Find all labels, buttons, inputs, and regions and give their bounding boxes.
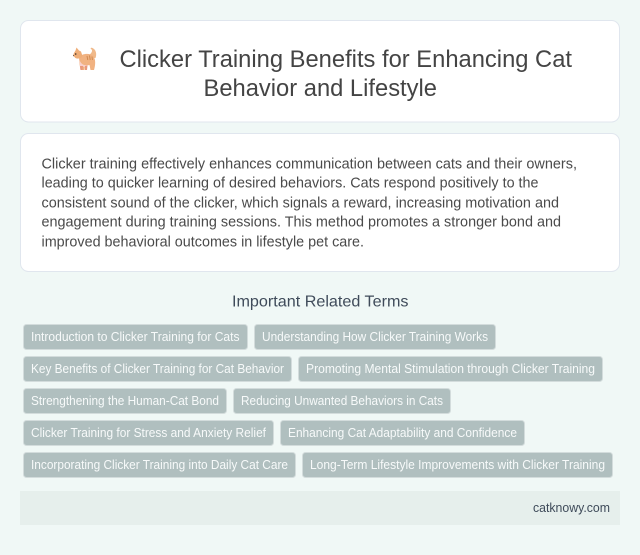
tag: Introduction to Clicker Training for Cats: [31, 330, 240, 344]
tag: Long-Term Lifestyle Improvements with Clicker Training: [310, 458, 605, 472]
panel: summary card: [20, 134, 620, 272]
tag: Key Benefits of Clicker Training for Cat Behavior: [31, 362, 284, 376]
summary text: improved behavioral outcomes in lifestyle pet care.: [42, 234, 364, 250]
tag: [302, 452, 612, 478]
tag: [24, 388, 226, 414]
tag: [280, 420, 524, 446]
footer source: catknowy.com: [533, 501, 610, 515]
tag: [24, 452, 296, 478]
tag: Understanding How Clicker Training Works: [262, 330, 488, 344]
tag: Reducing Unwanted Behaviors in Cats: [241, 394, 443, 408]
tag list: [24, 324, 612, 478]
tag: Incorporating Clicker Training into Daily Cat Care: [31, 458, 288, 472]
summary text: consistent sound of the clicker, which signals a reward, increasing motivation and: [42, 195, 559, 211]
panel: header card: [20, 20, 620, 122]
icon: cat: [73, 48, 96, 70]
footer: [20, 491, 620, 525]
summary text: leading to quicker learning of desired behaviors. Cats respond positively to the: [42, 176, 538, 192]
tag: [234, 388, 450, 414]
tag: [24, 420, 274, 446]
tag: Clicker Training for Stress and Anxiety Relief: [31, 426, 266, 440]
summary text: Clicker training effectively enhances communication between cats and their owners,: [42, 156, 577, 172]
tag: [298, 356, 602, 382]
tag: [254, 324, 496, 350]
tag: Enhancing Cat Adaptability and Confidence: [288, 426, 517, 440]
tag: Strengthening the Human-Cat Bond: [31, 394, 219, 408]
tag: [24, 324, 248, 350]
tag: Promoting Mental Stimulation through Clicker Training: [306, 362, 595, 376]
heading: important related terms: Important Related Terms: [232, 294, 408, 311]
title: [120, 46, 572, 102]
summary text: [42, 156, 577, 250]
title: Behavior and Lifestyle: [204, 75, 437, 102]
tag: [24, 356, 292, 382]
summary text: engagement during training sessions. This method promotes a stronger bond and: [42, 215, 561, 231]
title: Clicker Training Benefits for Enhancing Cat: [120, 46, 572, 73]
